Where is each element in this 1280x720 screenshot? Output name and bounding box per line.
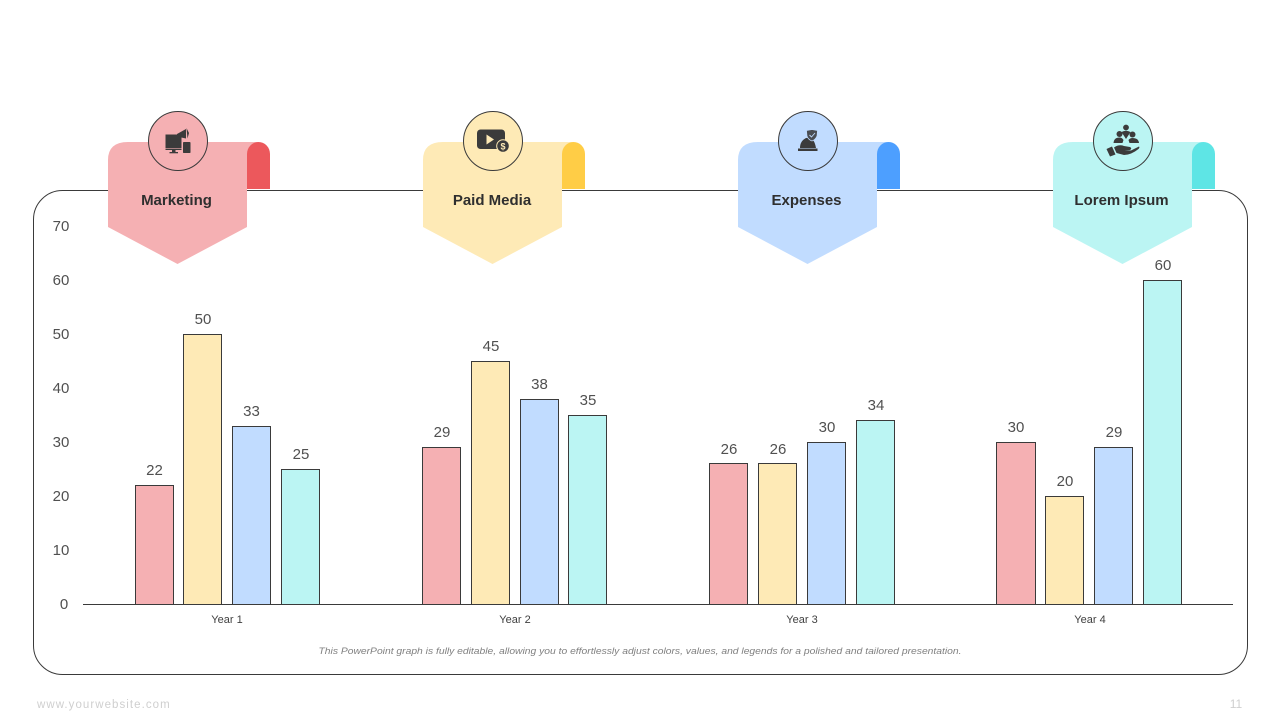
- category tag: Lorem Ipsum: Lorem Ipsum: [1074, 192, 1169, 209]
- x axis labels: Year 2: [499, 614, 531, 626]
- bar group: Year 4: [996, 257, 1182, 604]
- bar group: Year 4: 29: [1106, 424, 1122, 441]
- x axis labels: Year 1: [211, 614, 243, 626]
- bar group: Year 1: 33: [243, 403, 260, 420]
- bar group: Year 4: 30: [1008, 419, 1024, 436]
- icon: people on open hand: [1106, 125, 1139, 156]
- bar group: Year 1: 22: [146, 462, 163, 479]
- caption: This PowerPoint graph is fully editable, allowing you to effortlessly adjust colors, values, and legends for a polished and tailored presentation.: [318, 646, 962, 657]
- y axis labels: 50: [53, 326, 69, 343]
- y axis labels: 60: [53, 272, 69, 289]
- bar group: Year 2: [422, 338, 606, 604]
- x axis labels: Year 4: [1074, 614, 1106, 626]
- bar group: Year 4: 60: [1155, 257, 1171, 274]
- bar group: Year 3: [710, 397, 894, 604]
- category tag: Marketing: [108, 112, 270, 264]
- bar group: Year 4: 20: [1057, 473, 1073, 490]
- y axis labels: 70: [53, 218, 69, 235]
- footer: page number: 11: [1230, 697, 1243, 711]
- y axis labels: 10: [53, 542, 69, 559]
- y axis labels: 0: [60, 596, 68, 613]
- y axis labels: [53, 218, 69, 613]
- bar group: Year 2: 38: [531, 376, 548, 393]
- icon: monitor and megaphone: [166, 128, 190, 153]
- panel: chart frame: [34, 190, 1248, 674]
- category tag: Paid Media: Paid Media: [453, 192, 532, 209]
- icon: shield and service bell: [798, 130, 818, 151]
- bar group: Year 2: 35: [580, 392, 596, 409]
- x axis line: [83, 604, 1233, 606]
- x axis labels: Year 3: [786, 614, 818, 626]
- icon: video with dollar: [477, 130, 509, 152]
- bar group: Year 1: [136, 311, 320, 604]
- y axis labels: 30: [53, 434, 69, 451]
- category tag: Paid Media: [423, 112, 585, 264]
- category tag: Lorem Ipsum: [1053, 112, 1215, 264]
- bar group: Year 2: 29: [434, 424, 450, 441]
- bar group: Year 3: 26: [770, 441, 786, 458]
- category tag: Marketing: Marketing: [141, 192, 212, 209]
- x axis labels: [211, 614, 1106, 626]
- bar group: Year 1: 25: [293, 446, 309, 463]
- category tag: Expenses: [738, 112, 900, 264]
- bar group: Year 3: 34: [868, 397, 884, 414]
- bar group: Year 3: 26: [721, 441, 737, 458]
- bar group: Year 1: 50: [195, 311, 211, 328]
- bar group: Year 2: 45: [483, 338, 499, 355]
- y axis labels: 20: [53, 488, 69, 505]
- footer: website: www.yourwebsite.com: [36, 699, 171, 711]
- category tag: Expenses: Expenses: [771, 192, 842, 209]
- icon: video with dollar: $: [500, 142, 506, 152]
- y axis labels: 40: [53, 380, 69, 397]
- bar group: Year 3: 30: [819, 419, 835, 436]
